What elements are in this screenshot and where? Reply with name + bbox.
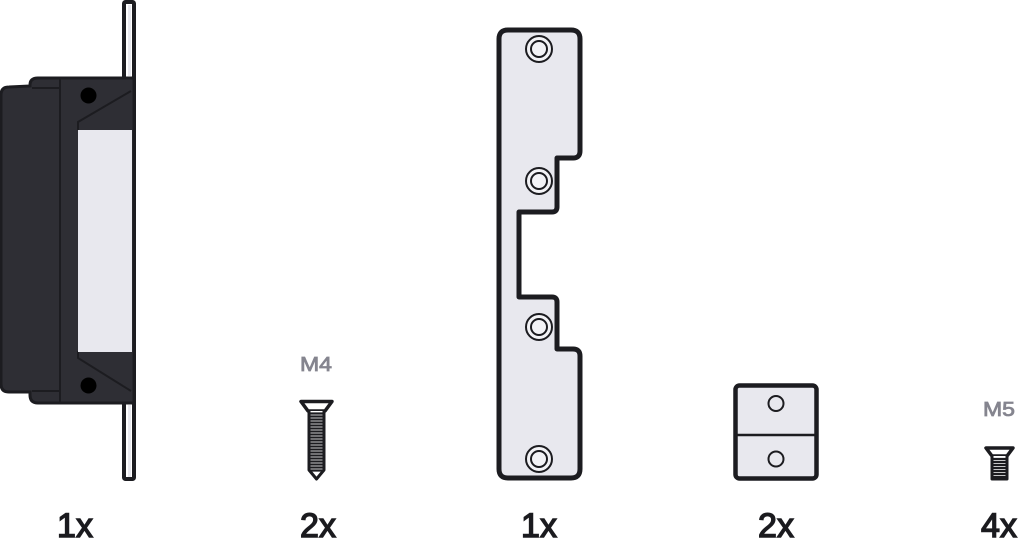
label: M5: M5 [983,399,1015,421]
icon: M4 screw [301,402,332,479]
label: M4: M4 [300,354,332,376]
icon: M5 screw [986,448,1013,479]
faceplate screw holes [526,36,552,472]
mounting bracket [736,386,816,478]
strike faceplate [499,30,580,478]
quantity labels [57,507,1017,538]
electric strike body [1,2,134,479]
